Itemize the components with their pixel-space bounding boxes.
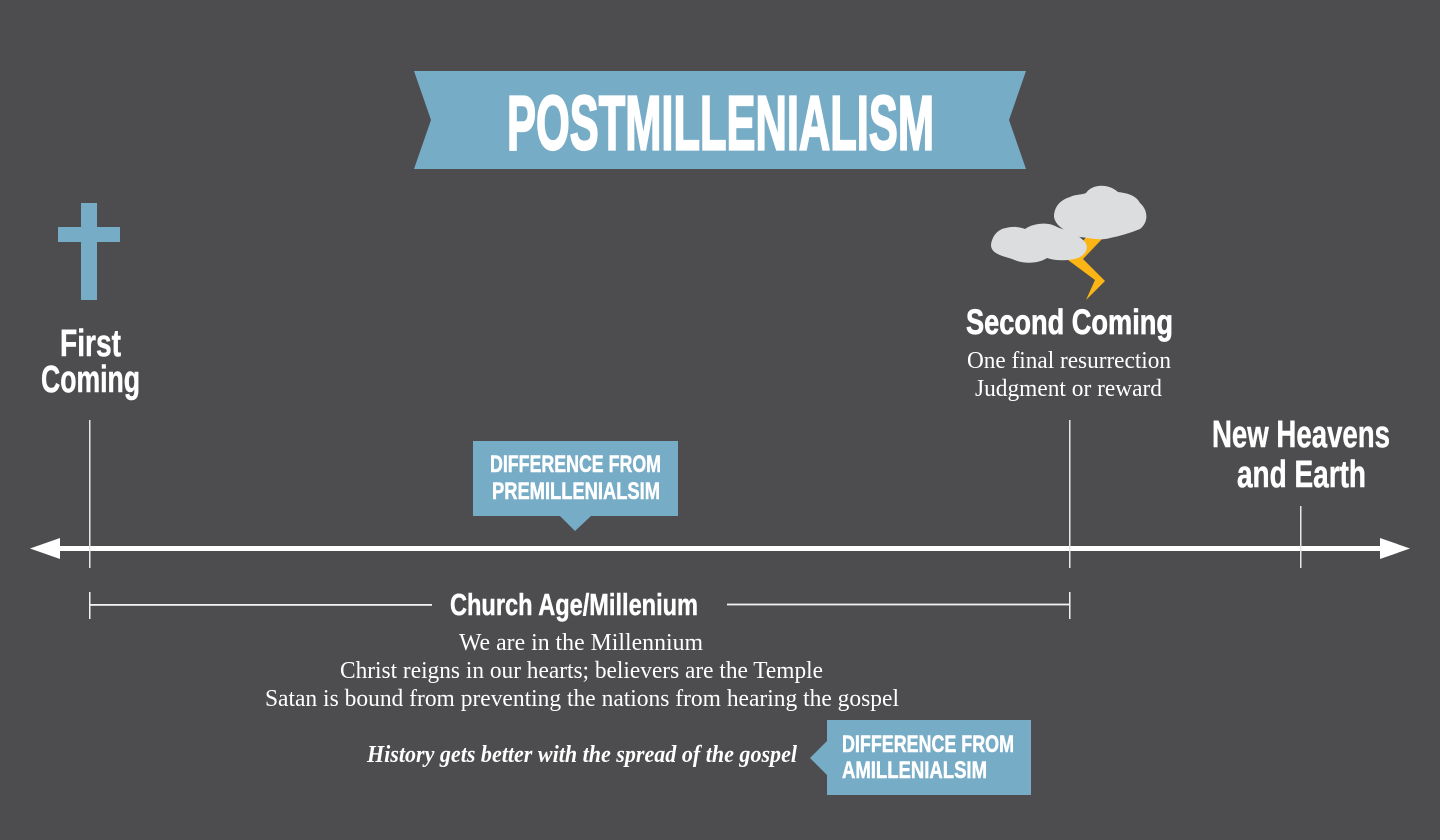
- bracket: church age span: [89, 592, 1070, 619]
- heading: New Heavens and Earth: [1212, 414, 1390, 496]
- heading: First Coming: First: [60, 323, 121, 365]
- text: second coming details: [967, 348, 1171, 402]
- heading: First Coming: [41, 323, 140, 401]
- text: second coming details: One final resurrection: [967, 348, 1171, 374]
- heading: New Heavens and Earth: and Earth: [1237, 454, 1366, 496]
- text: second coming details: Judgment or reward: [975, 376, 1162, 402]
- text: millennium description: We are in the Millennium: [459, 630, 703, 656]
- heading: Second Coming: Second Coming: [966, 303, 1173, 342]
- timeline tick: new heavens: [1300, 506, 1302, 568]
- icon: storm cloud with lightning: [991, 186, 1146, 300]
- heading: Church Age/Millenium: Church Age/Millenium: [450, 587, 698, 622]
- timeline arrow: [30, 420, 1410, 568]
- callout: difference from premillenialism: [473, 441, 678, 531]
- callout: difference from amillenialism: [810, 720, 1031, 795]
- timeline tick: second coming: [1069, 420, 1070, 568]
- callout: difference from amillenialism: DIFFERENCE FROM: [842, 731, 1014, 758]
- title banner: [414, 71, 1026, 169]
- callout: difference from premillenialism: DIFFERENCE FROM: [490, 451, 661, 478]
- icon: cross: [58, 203, 120, 300]
- callout: difference from amillenialism: AMILLENIALSIM: [842, 757, 987, 784]
- timeline tick: first coming: [89, 420, 90, 568]
- text: millennium description: [265, 630, 899, 712]
- text: millennium description: Christ reigns in our hearts; believers are the Temple: [340, 658, 823, 684]
- text: history statement: History gets better with the spread of the gospel: [366, 742, 797, 768]
- heading: First Coming: Coming: [41, 359, 140, 401]
- title: POSTMILLENIALISM: [507, 80, 934, 166]
- callout: difference from premillenialism: PREMILLENIALSIM: [492, 478, 660, 505]
- text: millennium description: Satan is bound from preventing the nations from hearing the gospel: [265, 686, 899, 712]
